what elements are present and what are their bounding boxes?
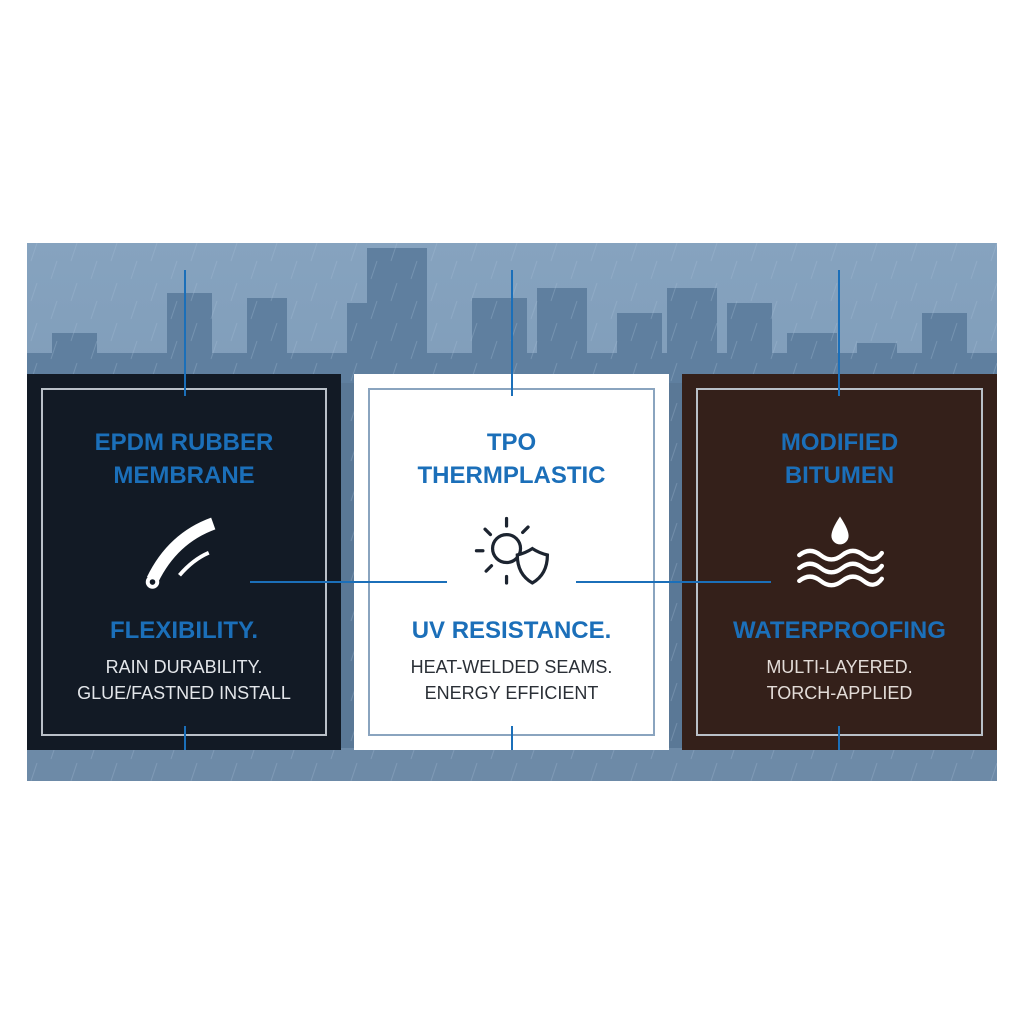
heading: EPDM: EPDM RUBBER (95, 429, 273, 456)
icon: sun with shield (474, 516, 549, 585)
body text: TORCH-APPLIED (767, 683, 912, 703)
heading: TPO: TPO (487, 429, 536, 456)
body text: RAIN DURABILITY. (106, 657, 262, 677)
panel: TPO thermoplastic (354, 374, 669, 750)
heading: TPO (418, 429, 606, 489)
body text: MULTI-LAYERED. (766, 657, 913, 677)
heading: modified bitumen: BITUMEN (785, 462, 894, 489)
icon: water drop and waves (797, 516, 884, 588)
heading: EPDM: MEMBRANE (113, 462, 255, 489)
panel: EPDM rubber membrane (27, 374, 341, 750)
subheading: UV resistance: UV RESISTANCE. (412, 617, 611, 644)
background banner: rainy city skyline (27, 243, 997, 781)
icon: flexible hose (146, 518, 216, 589)
heading: TPO: THERMPLASTIC (418, 462, 606, 489)
body text: HEAT-WELDED SEAMS. (411, 657, 612, 677)
heading: modified bitumen (781, 429, 898, 489)
panel: modified bitumen (682, 374, 997, 750)
subheading: flexibility: FLEXIBILITY. (110, 617, 258, 644)
heading: modified bitumen: MODIFIED (781, 429, 898, 456)
body text (411, 657, 612, 703)
subheading: waterproofing: WATERPROOFING (733, 617, 946, 644)
body text: ENERGY EFFICIENT (425, 683, 598, 703)
body text (77, 657, 291, 703)
body text: GLUE/FASTNED INSTALL (77, 683, 291, 703)
heading: EPDM (95, 429, 273, 489)
body text (766, 657, 913, 703)
